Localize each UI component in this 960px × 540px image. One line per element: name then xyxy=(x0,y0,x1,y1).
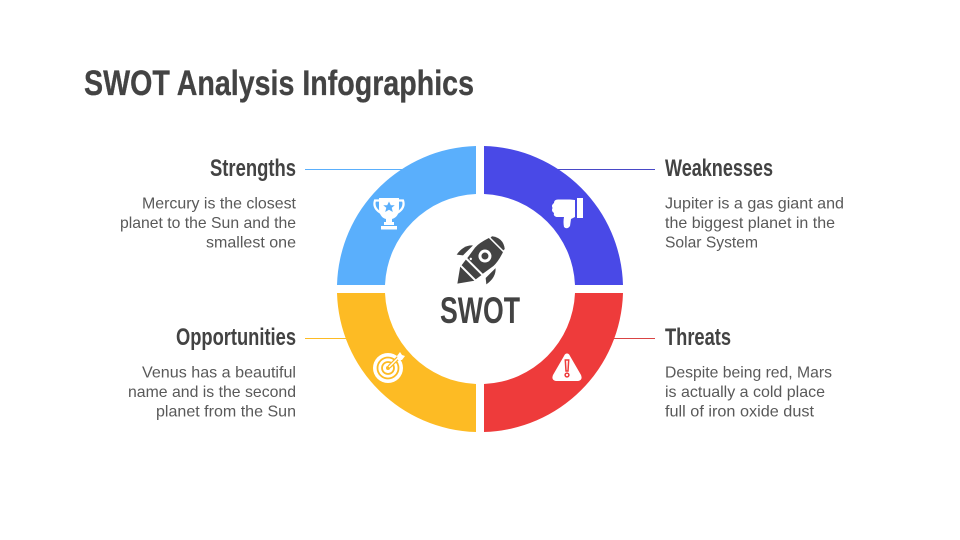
text: threats: full of iron oxide dust xyxy=(665,404,815,420)
text: threats xyxy=(665,364,832,420)
segment: threats xyxy=(484,293,623,432)
block: opportunities xyxy=(128,324,296,420)
block: weaknesses xyxy=(665,155,844,252)
icon: warning triangle xyxy=(552,354,582,381)
segment: strengths xyxy=(337,146,476,285)
text: opportunities: name and is the second xyxy=(128,384,296,401)
text: weaknesses xyxy=(665,196,844,252)
heading: threats: Threats xyxy=(665,324,731,351)
segment: weaknesses xyxy=(484,146,623,285)
icon: rocket xyxy=(442,225,516,299)
text: weaknesses: Jupiter is a gas giant and xyxy=(665,196,844,212)
text: threats: is actually a cold place xyxy=(665,384,825,401)
text: threats: Despite being red, Mars xyxy=(665,364,832,382)
text: strengths: planet to the Sun and the xyxy=(120,215,296,232)
connector: strengths xyxy=(305,168,405,170)
text: opportunities: Venus has a beautiful xyxy=(142,364,296,382)
title: SWOT Analysis Infographics xyxy=(84,63,474,103)
text: opportunities: planet from the Sun xyxy=(156,404,296,420)
block: strengths xyxy=(120,155,297,252)
icon: trophy xyxy=(374,198,404,230)
block: threats xyxy=(665,324,832,420)
segment: opportunities xyxy=(337,293,476,432)
text: weaknesses: the biggest planet in the xyxy=(665,215,835,232)
text: opportunities xyxy=(128,364,296,420)
center label: SWOT xyxy=(440,290,520,331)
heading: weaknesses: Weaknesses xyxy=(665,155,773,182)
connector: opportunities xyxy=(305,338,350,340)
icon: target xyxy=(373,352,405,383)
text: strengths: Mercury is the closest xyxy=(142,196,297,212)
text: strengths: smallest one xyxy=(206,234,296,252)
text: weaknesses: Solar System xyxy=(665,234,758,252)
icon: thumbs down xyxy=(552,198,583,228)
heading: strengths: Strengths xyxy=(210,155,296,182)
text: strengths xyxy=(120,196,297,252)
connector: threats xyxy=(610,338,655,340)
connector: weaknesses xyxy=(555,168,655,170)
heading: opportunities: Opportunities xyxy=(176,324,296,351)
